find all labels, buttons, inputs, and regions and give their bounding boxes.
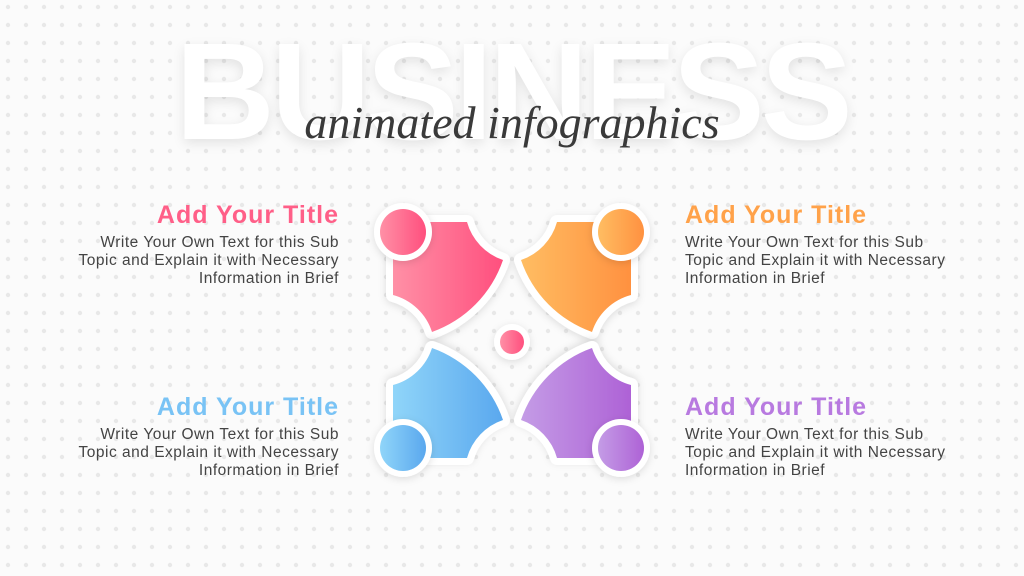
text block: bottom-left: Add Your Title <box>157 393 339 421</box>
text block: top-left: Topic and Explain it with Necessary <box>79 252 339 269</box>
text block: bottom-right: Information in Brief <box>685 462 825 479</box>
text block: top-left <box>78 201 339 287</box>
text block: bottom-left: Information in Brief <box>199 462 339 479</box>
shape: purple quadrant <box>521 348 631 458</box>
circle: pink <box>374 203 432 261</box>
text block: top-right: Add Your Title <box>685 201 867 229</box>
text block: bottom-left: Write Your Own Text for this Sub <box>100 426 339 443</box>
text block: top-right: Write Your Own Text for this Sub <box>685 234 924 251</box>
text block: bottom-right <box>685 393 945 479</box>
shape: orange quadrant <box>521 222 631 332</box>
center dot <box>494 324 530 360</box>
text block: top-right: Information in Brief <box>685 270 825 287</box>
text block: top-right <box>685 201 945 287</box>
text block: top-left: Add Your Title <box>157 201 339 229</box>
text block: bottom-right: Topic and Explain it with Necessary <box>685 444 945 461</box>
text block: top-left: Write Your Own Text for this Sub <box>100 234 339 251</box>
shape: pink quadrant <box>393 222 503 332</box>
text block: bottom-left: Topic and Explain it with Necessary <box>79 444 339 461</box>
shape: blue quadrant <box>393 348 503 458</box>
text block: bottom-right: Write Your Own Text for this Sub <box>685 426 924 443</box>
text block: top-right: Topic and Explain it with Necessary <box>685 252 945 269</box>
circle: orange <box>592 203 650 261</box>
title: BUSINESS: BUSINESS <box>175 15 849 169</box>
text block: bottom-left <box>78 393 339 479</box>
text block: top-left: Information in Brief <box>199 270 339 287</box>
circle: blue <box>374 419 432 477</box>
circle: purple <box>592 419 650 477</box>
text block: bottom-right: Add Your Title <box>685 393 867 421</box>
subtitle: animated infographics <box>304 97 720 148</box>
